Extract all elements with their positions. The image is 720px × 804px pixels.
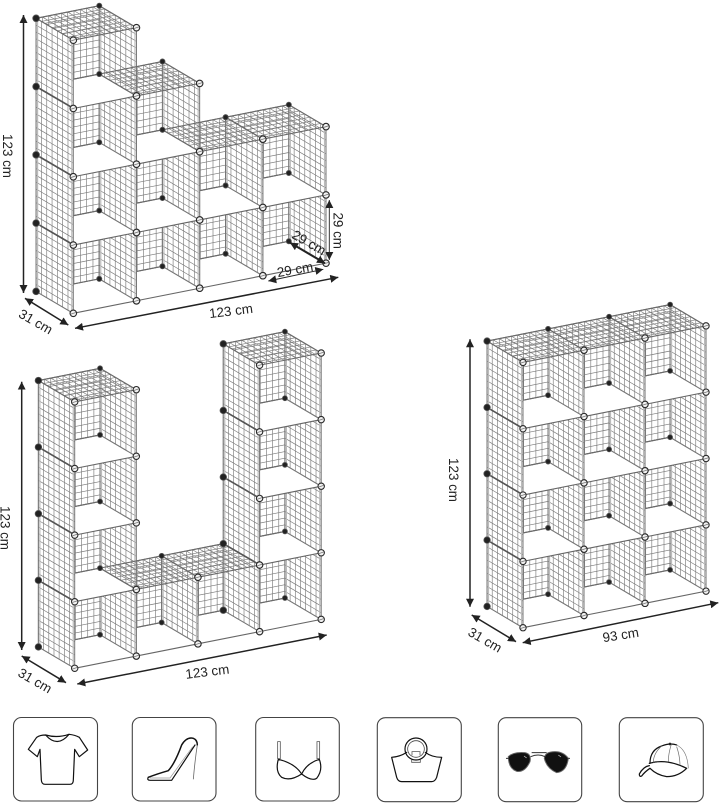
shelf: U-shaped configuration xyxy=(35,329,324,671)
icon: high heel xyxy=(132,718,216,801)
dimension labels: staircase configuration: 29 cm xyxy=(330,212,346,249)
dimension arrows: staircase configuration xyxy=(24,15,338,328)
dimension labels: staircase configuration: 31 cm xyxy=(16,306,55,337)
dimension labels: U-shaped configuration: 31 cm xyxy=(15,665,55,696)
icon: sunglasses xyxy=(498,718,582,802)
dimension labels: 3 by 4 grid configuration: 31 cm xyxy=(465,624,505,656)
dimension labels: U-shaped configuration: 123 cm xyxy=(185,662,230,682)
icon: t-shirt xyxy=(14,718,98,801)
dimension labels: staircase configuration: 123 cm xyxy=(208,301,254,321)
dimension labels: 3 by 4 grid configuration xyxy=(446,458,640,656)
dimension labels: 3 by 4 grid configuration: 93 cm xyxy=(602,625,640,645)
dimension labels: staircase configuration: 29 cm xyxy=(276,259,314,280)
shelf: staircase configuration xyxy=(33,3,329,317)
dimension labels: staircase configuration: 29 cm xyxy=(289,227,329,258)
dimension labels: 3 by 4 grid configuration: 123 cm xyxy=(446,458,461,502)
dimension labels: staircase configuration xyxy=(0,134,346,337)
dimension labels: staircase configuration: 123 cm xyxy=(0,134,15,178)
shelf: 3 by 4 grid configuration xyxy=(484,302,709,631)
dimension arrows: U-shaped configuration xyxy=(22,382,327,684)
icon: handbag xyxy=(377,718,461,802)
icon: bra xyxy=(256,718,339,801)
dimension arrows: 3 by 4 grid configuration xyxy=(470,339,718,643)
dimension labels: U-shaped configuration xyxy=(0,506,230,696)
icon: baseball cap xyxy=(619,718,703,802)
